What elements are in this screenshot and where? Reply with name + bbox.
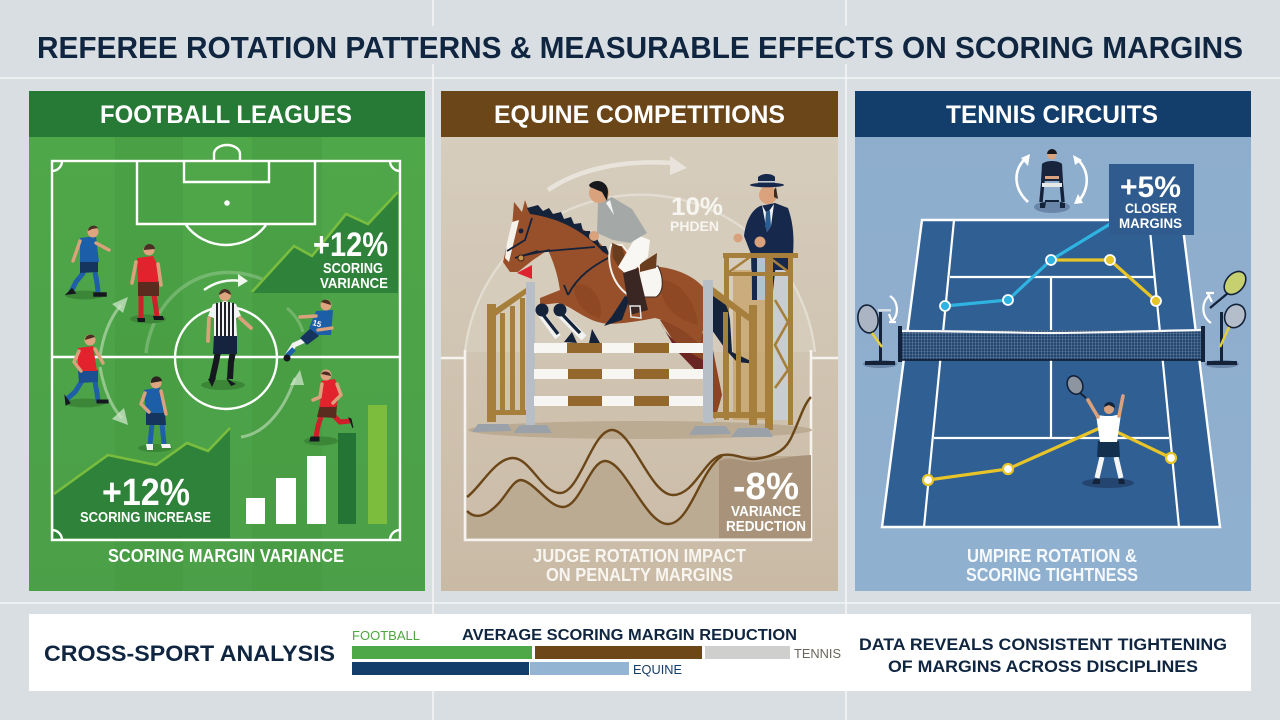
right racket stand: [1203, 267, 1250, 368]
rotation arrows: [100, 272, 304, 437]
tennis court: [882, 220, 1220, 527]
player: red top: [130, 244, 166, 324]
lower stat: scoring increase: SCORING INCREASE: [80, 510, 211, 526]
pitch markings: [52, 145, 400, 540]
panel: equine competitions: [441, 91, 838, 591]
tennis caption: [966, 546, 1138, 585]
player: red running: [304, 370, 353, 446]
lower stat: scoring increase: +12%: [102, 472, 190, 514]
stat: variance reduction: -8%: [733, 466, 799, 508]
tennis caption: UMPIRE ROTATION &: [967, 546, 1137, 566]
panel: tennis circuits: [855, 91, 1251, 591]
comparison bars: EQUINE: [633, 662, 682, 677]
upper stat: scoring variance: VARIANCE: [320, 275, 388, 292]
player: blue bottom: [138, 376, 172, 452]
tennis net: [898, 326, 1205, 362]
upper yellow line chart: [1046, 255, 1161, 306]
small stat text: PHDEN: [670, 218, 719, 234]
lower stat: scoring increase: [52, 428, 230, 540]
bar chart: [246, 405, 387, 524]
variance wave chart: [467, 397, 811, 538]
stat: closer margins: +5%: [1120, 171, 1181, 204]
comparison bars: AVERAGE SCORING MARGIN REDUCTION: [462, 627, 797, 644]
equine heading: [441, 91, 838, 137]
comparison bars: TENNIS: [794, 646, 841, 661]
title: REFEREE ROTATION PATTERNS & MEASURABLE EFFECTS ON SCORING MARGINS: [37, 30, 1243, 65]
lower yellow line chart: [923, 428, 1176, 485]
equine caption: JUDGE ROTATION IMPACT: [533, 546, 746, 566]
stat: variance reduction: REDUCTION: [726, 519, 806, 535]
panel: cross-sport analysis: [29, 614, 1251, 691]
small stat text: [670, 193, 723, 234]
upper stat: scoring variance: [252, 192, 398, 293]
judge tower: [723, 253, 798, 430]
takeaway text: OF MARGINS ACROSS DISCIPLINES: [888, 657, 1198, 676]
tennis heading: [855, 91, 1251, 137]
panel: football leagues: [29, 91, 425, 591]
comparison bars: [352, 627, 841, 677]
arena arc and frame: [441, 195, 838, 540]
jump fences: [472, 280, 773, 437]
umpire rotation arrows: [1016, 154, 1087, 204]
player: red left: [65, 334, 108, 408]
takeaway text: DATA REVEALS CONSISTENT TIGHTENING: [859, 635, 1227, 654]
equine heading: EQUINE COMPETITIONS: [494, 101, 785, 129]
football heading: [29, 91, 425, 137]
stat: closer margins: CLOSER: [1125, 200, 1177, 216]
judge: [734, 174, 793, 300]
umpire: [1034, 149, 1070, 213]
ground: [468, 421, 812, 439]
referee: [201, 289, 251, 390]
tennis caption: SCORING TIGHTNESS: [966, 565, 1138, 585]
equine caption: ON PENALTY MARGINS: [546, 565, 733, 585]
horse: [503, 200, 757, 420]
tennis player: [1064, 373, 1134, 488]
cross-sport heading: CROSS-SPORT ANALYSIS: [44, 641, 335, 666]
left racket stand: [856, 296, 897, 368]
tennis heading: TENNIS CIRCUITS: [946, 101, 1158, 129]
comparison bars: FOOTBALL: [352, 628, 420, 643]
stat: variance reduction: [719, 455, 811, 538]
equine caption: [533, 546, 746, 585]
upper stat: scoring variance: SCORING: [323, 260, 383, 277]
player: blue top-left: [65, 226, 109, 300]
stat: variance reduction: VARIANCE: [731, 504, 801, 520]
football caption: SCORING MARGIN VARIANCE: [108, 546, 344, 566]
takeaway text: [859, 635, 1227, 676]
upper stat: scoring variance: +12%: [313, 226, 388, 264]
player: blue sliding: [284, 300, 333, 362]
player: blue sliding: 15: [311, 318, 323, 329]
red flag: [517, 265, 532, 279]
stat: closer margins: MARGINS: [1119, 215, 1182, 231]
blue line chart: [940, 224, 1110, 311]
rider and saddle: [589, 181, 662, 318]
football heading: FOOTBALL LEAGUES: [100, 101, 352, 129]
rotation arrow: [548, 156, 687, 190]
stat: closer margins: [1109, 164, 1194, 235]
small stat text: 10%: [671, 193, 723, 221]
